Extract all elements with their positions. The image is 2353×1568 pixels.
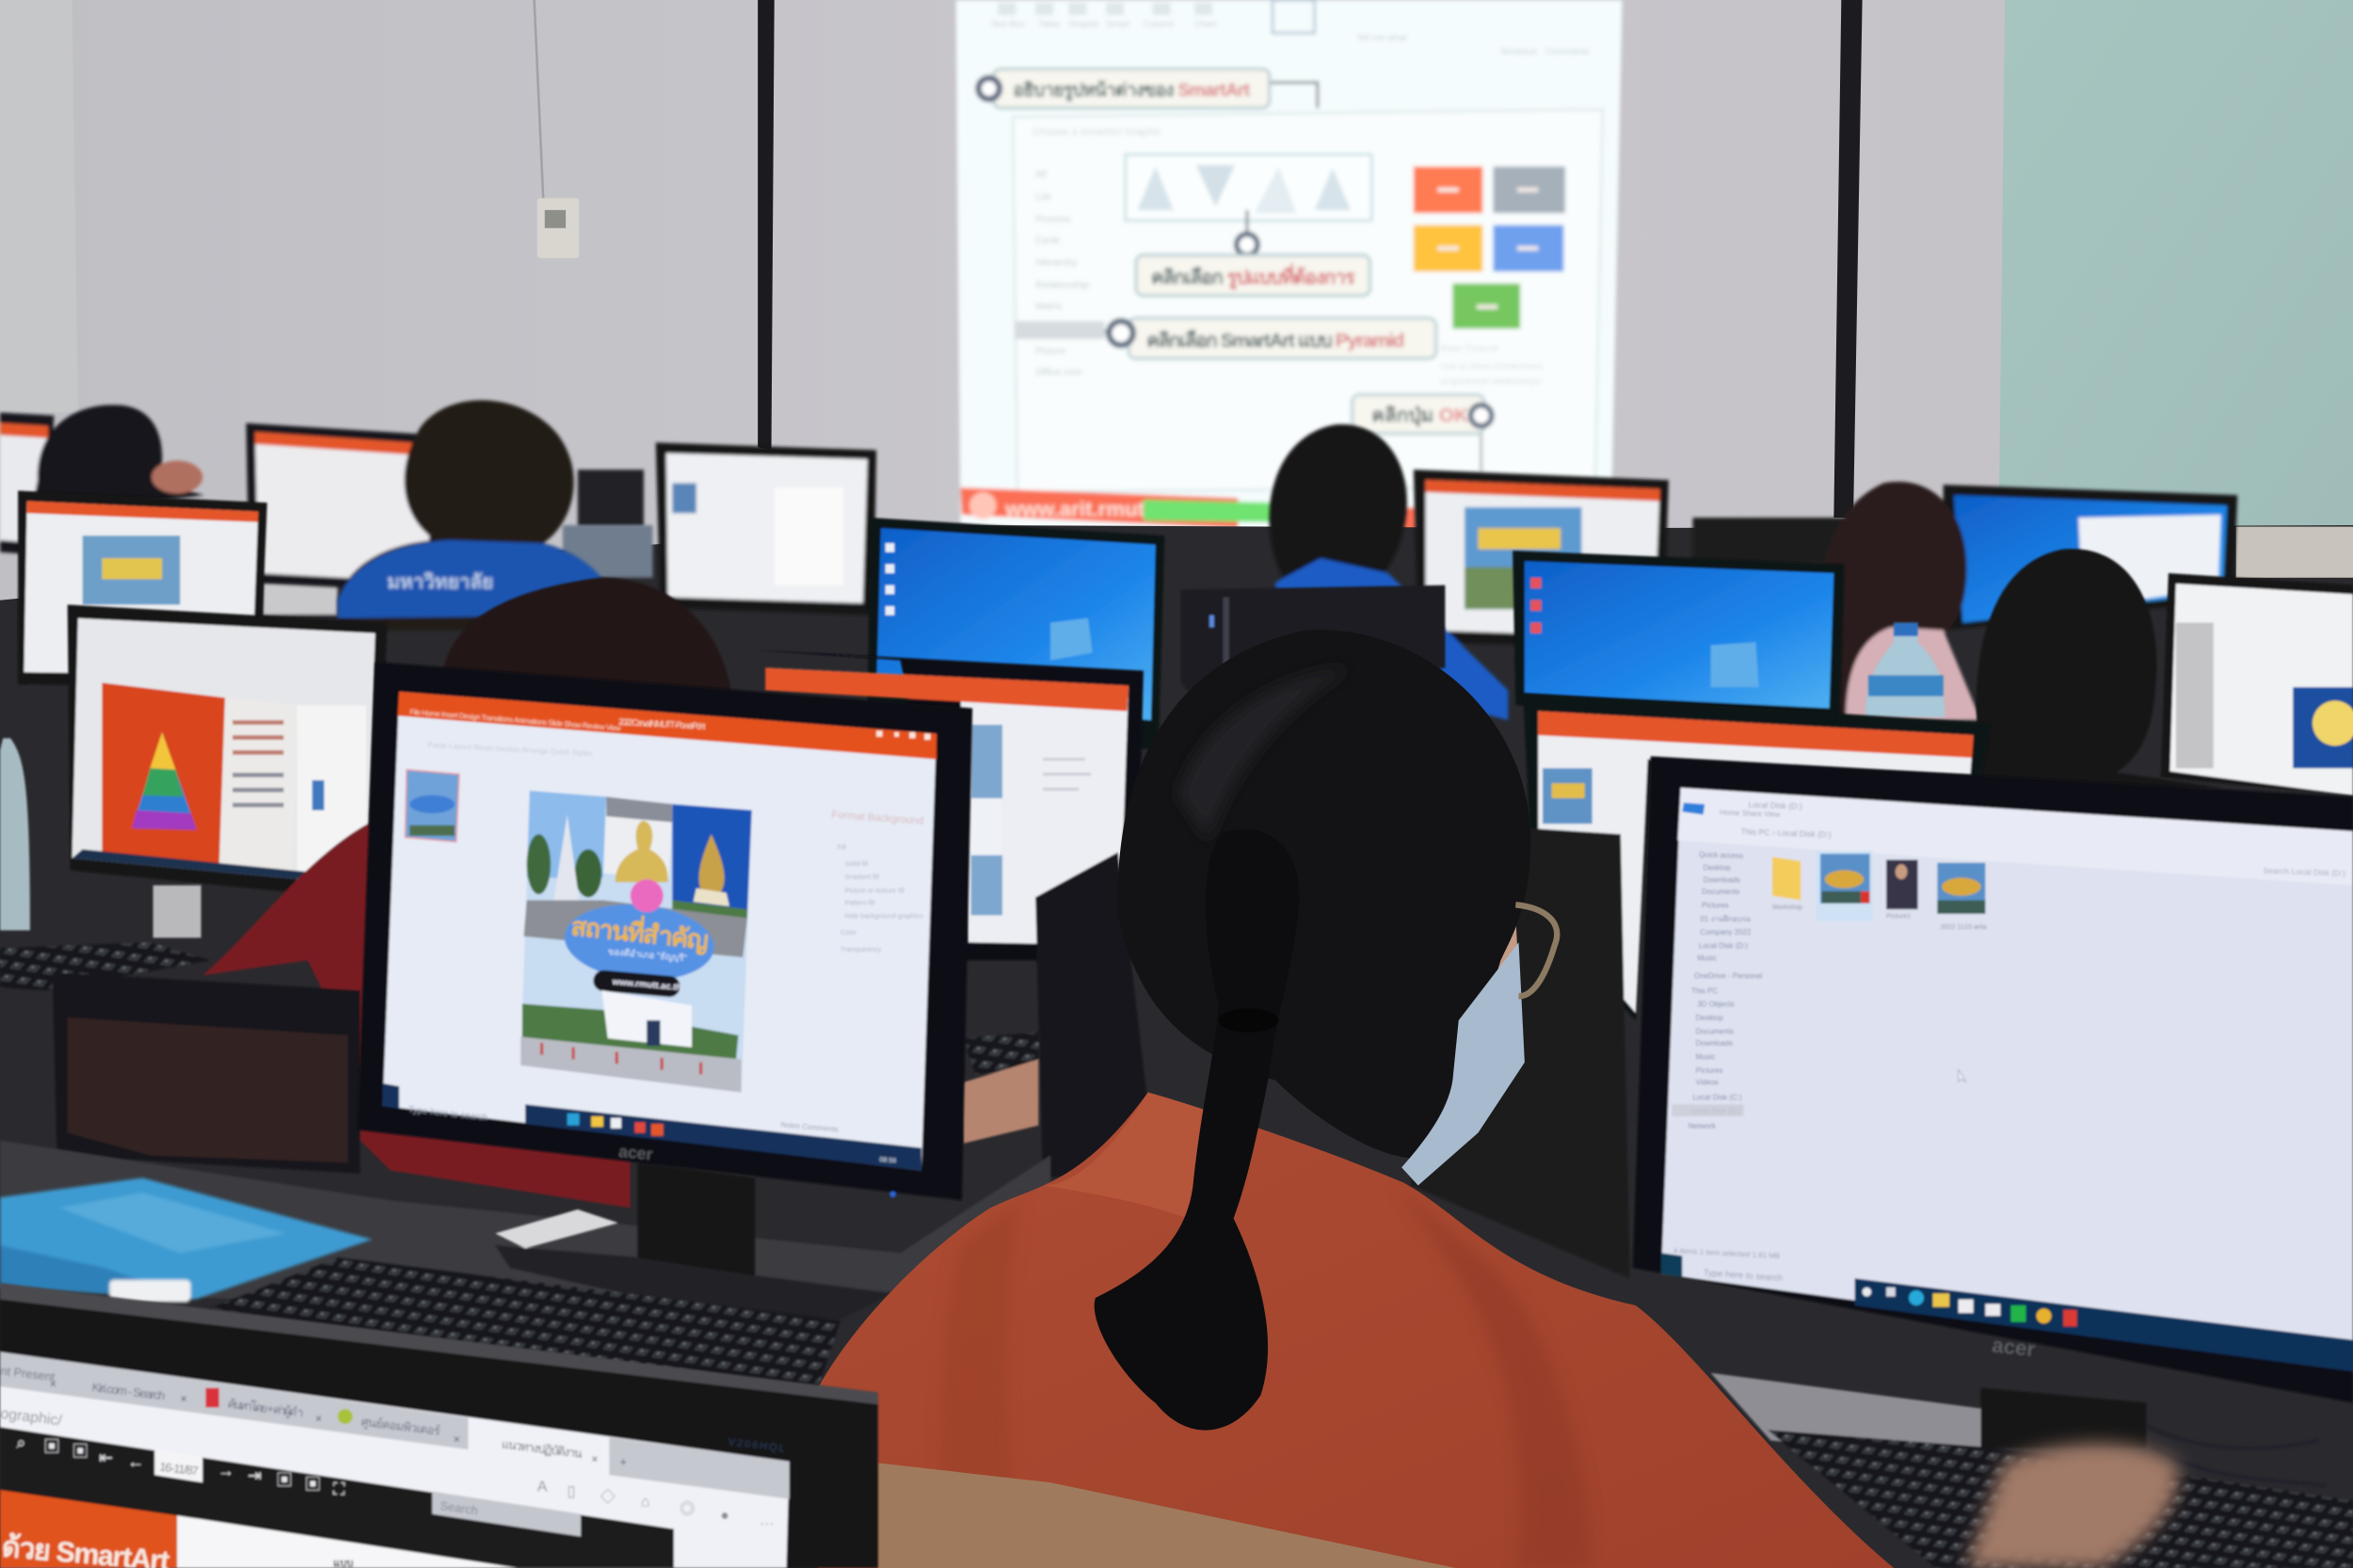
- back monitor 4: [1414, 470, 1669, 648]
- chair back bottom: [878, 1463, 1456, 1568]
- navigation pane: This PC: [1691, 986, 1718, 995]
- person in blue shirt: [338, 400, 608, 631]
- favicons: [205, 1388, 353, 1424]
- dialog category list: Process: [1035, 215, 1071, 225]
- navigation pane: Desktop: [1704, 864, 1731, 872]
- red road posts: [540, 1043, 702, 1074]
- browser window icons: ◎: [680, 1501, 695, 1518]
- portrait icon: [1886, 860, 1918, 920]
- format background pane: Transparency: [840, 946, 882, 953]
- search box caption: Type here to search: [408, 1104, 488, 1123]
- hair sheen: [1178, 667, 1351, 840]
- navigation pane: Pictures: [1696, 1066, 1722, 1075]
- blue desktop monitor: [868, 518, 1164, 750]
- toolbar icons: ▣: [43, 1437, 60, 1456]
- ribbon text: Tell me what: [1356, 33, 1407, 43]
- ribbon tabs: File Home Insert Design Transitions Animations Slide Show Review View: [409, 708, 621, 733]
- ribbon text: Smartcut: [1500, 46, 1537, 56]
- black screen frame right: [1833, 0, 1863, 518]
- tower behind the student: [1035, 828, 1630, 1278]
- tab close marks: ×: [50, 1377, 56, 1391]
- folder icon: [1772, 856, 1802, 911]
- format background pane: Format Background: [831, 809, 924, 827]
- navigation pane: Local Disk (C:): [1692, 1094, 1742, 1102]
- browser window icons: [537, 1480, 775, 1528]
- status bar: Notes Comments: [780, 1120, 839, 1134]
- black screen frame left: [758, 0, 775, 450]
- stand: [495, 1163, 893, 1320]
- back desks and floor darkness: [0, 525, 2353, 1568]
- tab close marks: ×: [591, 1451, 599, 1465]
- pink balloon: [631, 879, 664, 912]
- address text: ographic/: [0, 1406, 63, 1430]
- ribbon text: Text Box: [990, 20, 1025, 30]
- description text: [1441, 344, 1544, 387]
- model label: V206HQL: [728, 1436, 786, 1455]
- navigation pane: OneDrive - Personal: [1694, 971, 1762, 980]
- cables: [2146, 1426, 2326, 1485]
- callout 1: SmartArt window: [979, 69, 1318, 108]
- status text: 4 items 1 item selected 1.81 MB: [1673, 1246, 1780, 1260]
- monitor stand left: [153, 886, 201, 937]
- bezel: [357, 662, 972, 1200]
- golden emblem right: [699, 834, 725, 893]
- dialog category list: [1035, 169, 1089, 378]
- shirt shadow left: [941, 1200, 1020, 1568]
- format background pane: Fill: [838, 843, 846, 851]
- screen: [383, 692, 936, 1171]
- browser window icons: …: [760, 1512, 775, 1528]
- callout 3: pyramid: [1104, 318, 1436, 359]
- selected drive row: [1672, 1104, 1744, 1116]
- dialog category list: List: [1035, 192, 1050, 202]
- navigation pane: Network: [1689, 1122, 1716, 1130]
- monitor back behind the second student: [578, 470, 644, 527]
- navigation pane: Desktop: [1696, 1014, 1723, 1022]
- ribbon text: Paste Layout Reset Section Arrange Quick Styles: [427, 741, 593, 758]
- callout 3: pyramid: คลิกเลือก SmartArt แบบ Pyramid: [1146, 329, 1404, 351]
- callout 2: pick a group: คลิกเลือก รูปแบบที่ต้องการ: [1151, 263, 1356, 290]
- dialog category list: Picture: [1035, 346, 1066, 357]
- hand on keyboard: [1966, 1444, 2178, 1568]
- page number box: [154, 1449, 202, 1482]
- navigation pane: Documents: [1696, 1027, 1734, 1035]
- navigation pane: Music: [1697, 953, 1717, 962]
- shirt: [818, 1093, 1894, 1568]
- browser tabs text: [0, 1363, 584, 1461]
- ribbon text: [990, 20, 1590, 56]
- callout 4: click OK: [1353, 394, 1492, 472]
- back monitor 2: [246, 424, 439, 593]
- left desk keyboard: [0, 942, 210, 990]
- navigation pane: Music: [1696, 1053, 1715, 1062]
- format background pane: [831, 809, 924, 953]
- search field text: Search Local Disk (D:): [2263, 866, 2345, 878]
- page number box: 16-11/87: [159, 1459, 200, 1478]
- thumbnail: [405, 770, 459, 841]
- URL pill: [592, 969, 682, 998]
- building and park: [522, 1004, 738, 1068]
- third row: [0, 578, 1992, 1320]
- selected file icon: [1816, 851, 1873, 921]
- toolbar icons: ▣: [305, 1475, 321, 1494]
- person in blue shirt: มหาวิทยาลัย: [387, 571, 493, 593]
- face mask: [1401, 942, 1525, 1185]
- format background pane: Hide background graphics: [845, 913, 923, 920]
- browser tabs text: Kiri.com - Search: [91, 1380, 166, 1402]
- power led: [889, 1192, 896, 1197]
- dialog category list: Relationship: [1035, 280, 1089, 291]
- monitor far right: [2161, 573, 2353, 795]
- format background pane: Solid fill: [845, 860, 869, 868]
- trees: [527, 834, 551, 894]
- navigation pane: Downloads: [1704, 875, 1740, 884]
- toolbar icons: ⇥: [248, 1466, 262, 1485]
- navigation pane: Local Disk (D:): [1691, 1107, 1740, 1115]
- acer logo right: acer: [1991, 1334, 2037, 1361]
- toolbar icons: ▣: [276, 1470, 293, 1489]
- projection screen: [956, 0, 1623, 583]
- navigation pane: Quick access: [1699, 850, 1743, 860]
- navigation pane: Downloads: [1696, 1039, 1733, 1048]
- toolbar icons: →: [217, 1462, 234, 1480]
- navigation pane: Pictures: [1702, 902, 1729, 910]
- highlighted ribbon button: [1273, 0, 1315, 33]
- poster subtitle: ของดีอำเภอ "ธัญบุรี": [607, 946, 687, 964]
- dialog category list: Hierarchy: [1035, 258, 1078, 268]
- tab close marks: [50, 1377, 627, 1469]
- browser tabs text: ศูนย์คอมพิวเตอร์: [360, 1415, 441, 1439]
- person behind monitors, dark hair: [442, 578, 730, 705]
- tab close marks: +: [619, 1455, 627, 1469]
- callout 1: SmartArt window: อธิบายรูปหน้าต่างของ SmartArt: [1013, 80, 1251, 102]
- person far right: [1977, 549, 2221, 788]
- toolbar icons: ⛶: [333, 1480, 345, 1498]
- hair: [1118, 630, 1530, 1159]
- collar shadow: [1043, 1093, 1245, 1223]
- screen: [0, 1352, 790, 1568]
- shirt fold: [1396, 1185, 1591, 1568]
- desk near left: [0, 1141, 1050, 1320]
- poster title: สถานที่สำคัญ: [569, 907, 711, 956]
- browser tab strip: [0, 1352, 468, 1449]
- monitor left second row: [18, 490, 267, 687]
- forearm at desk: [960, 1060, 1038, 1144]
- left water bottle: [0, 738, 30, 930]
- window controls: [876, 730, 931, 740]
- ribbon text: Shapes: [1068, 20, 1099, 30]
- format background pane: Gradient fill: [845, 873, 879, 881]
- viewer toolbar: [0, 1427, 674, 1568]
- tab close marks: ×: [454, 1432, 460, 1447]
- presenter assistant in blue: [1270, 424, 1508, 720]
- toolbar icons: ⌕: [17, 1432, 25, 1451]
- red footer banner: www.arit.rmutt.ac.th: [1004, 497, 1207, 520]
- back right case: [1692, 518, 1843, 563]
- woman in pink shirt: [1819, 482, 1981, 720]
- back row: [0, 400, 2237, 720]
- glasses: [1515, 904, 1557, 997]
- viewer search box: [432, 1492, 581, 1537]
- wall thermostat: [535, 0, 579, 258]
- title text: 2022 Canva IN MUTT - PowerPoint: [618, 717, 706, 732]
- mouse pointer: [1959, 1070, 1966, 1081]
- desk surface right: [1711, 1373, 1996, 1463]
- URL pill: www.rmutt.ac.th: [611, 977, 682, 993]
- taskbar: [1855, 1278, 2353, 1371]
- person far left: [30, 405, 204, 518]
- bezel: [1633, 757, 2353, 1403]
- monitor right third row: [1523, 694, 1992, 1020]
- white slide: [177, 1515, 518, 1568]
- navigation pane: [1689, 850, 1762, 1130]
- back monitor far left: [0, 412, 54, 555]
- menu tabs: Home Share View: [1720, 808, 1781, 819]
- toolbar icons: ▣: [72, 1442, 88, 1461]
- keyboard centre: [210, 1257, 840, 1388]
- browser tabs text: แนวทางปฏิบัติงาน: [501, 1437, 584, 1461]
- folder icon: Workshop: [1772, 904, 1802, 911]
- computer tower centre: [1181, 585, 1445, 705]
- golden statue: [616, 821, 668, 882]
- file tab: [1682, 803, 1705, 815]
- description text: Basic Pyramid: [1441, 344, 1498, 354]
- ribbon icons: [998, 3, 1212, 15]
- third file icon: 2022 1123 arita: [1941, 923, 1987, 931]
- front student: [818, 630, 1894, 1568]
- browser tabs text: nt Present: [0, 1363, 56, 1384]
- navigation pane: 01 งานฝึกอบรม: [1700, 915, 1751, 923]
- ponytail: [1095, 829, 1299, 1431]
- centre keyboard at back: [964, 1032, 1038, 1074]
- browser window icons: ●: [720, 1508, 729, 1524]
- blue document folder: [0, 1177, 372, 1303]
- clock: 08:56: [879, 1156, 897, 1165]
- portrait icon: Picture1: [1886, 913, 1911, 920]
- red footer banner: [960, 488, 1418, 540]
- callout 2: pick a group: [1136, 255, 1370, 296]
- toolbar icons: ←: [128, 1452, 144, 1471]
- navigation pane: 3D Objects: [1697, 1000, 1735, 1009]
- keyboard right: [1768, 1430, 2353, 1568]
- chair back: [53, 972, 360, 1174]
- toolbar icons: ⇤: [99, 1448, 113, 1466]
- desk items: [563, 525, 653, 578]
- dialog category list: Office.com: [1035, 368, 1081, 378]
- monitor stand right: [1981, 1388, 2146, 1448]
- dialog category list: All: [1035, 169, 1047, 180]
- board tray: [2236, 527, 2353, 578]
- dialog title: Choose a SmartArt Graphic: [1032, 126, 1161, 137]
- dialog category list: Cycle: [1035, 235, 1060, 246]
- navigation pane: Videos: [1696, 1079, 1719, 1087]
- grey road band: [523, 901, 747, 957]
- orange slide panel: [0, 1490, 177, 1568]
- title bar: [398, 692, 936, 760]
- second row: [18, 490, 2353, 795]
- top edge: [0, 1283, 878, 1404]
- format background pane: Color: [840, 929, 857, 936]
- taskbar search text: Type here to search: [1703, 1268, 1783, 1284]
- ribbon text: Smart: [1106, 20, 1130, 30]
- description text: Use to show containment,: [1441, 361, 1544, 372]
- taskbar: [383, 1083, 921, 1171]
- water bottle: [1865, 623, 1945, 717]
- back monitor 3: [656, 442, 876, 616]
- red-shirt seated student: [202, 823, 631, 1208]
- navigation pane: Company 2022: [1700, 928, 1752, 936]
- tab close marks: ×: [315, 1411, 322, 1425]
- teal whiteboard: [1999, 0, 2353, 528]
- tab close marks: ×: [180, 1392, 187, 1406]
- browser window icons: A: [537, 1480, 548, 1496]
- monitor left third row: [68, 604, 387, 901]
- slide poster: [520, 791, 752, 1093]
- hair tie: [1219, 1008, 1278, 1032]
- browser window icons: ⌂: [641, 1495, 649, 1511]
- SmartArt dialog outline: [1013, 109, 1603, 492]
- right monitor assembly: [1711, 1373, 2353, 1568]
- left wall corner: [0, 0, 78, 412]
- blue desktop monitor right: [1513, 551, 1845, 720]
- browser window icons: ◇: [600, 1489, 616, 1506]
- dialog category list: Matrix: [1035, 301, 1063, 312]
- blue badge: [561, 899, 717, 986]
- pale desk patch: [263, 583, 338, 616]
- explorer white header: [1678, 788, 2353, 886]
- navigation pane: Documents: [1702, 888, 1739, 896]
- navigation pane: Local Disk (D:): [1699, 942, 1748, 951]
- selected pyramid category: [1015, 321, 1104, 339]
- third file icon: [1937, 863, 1987, 931]
- address bar text: This PC › Local Disk (D:): [1740, 826, 1832, 840]
- explorer title: Local Disk (D:): [1748, 800, 1802, 811]
- browser window icons: ▯: [568, 1483, 575, 1499]
- screen: [1661, 788, 2353, 1368]
- colour swatches: [1414, 167, 1565, 328]
- ribbon text: Table: [1038, 20, 1060, 30]
- bezel: [0, 1283, 878, 1568]
- ribbon text: Comments: [1545, 46, 1590, 56]
- format background pane: Picture or texture fill: [845, 888, 904, 895]
- format background pane: Pattern fill: [845, 899, 875, 906]
- front centre monitor: [357, 662, 972, 1320]
- start button: [1661, 1253, 1682, 1277]
- front-left monitor: [0, 1283, 878, 1568]
- acer logo: acer: [618, 1142, 653, 1163]
- pyramid gallery: [1126, 154, 1371, 220]
- white spire: [553, 815, 579, 901]
- front right monitor: [1633, 757, 2353, 1403]
- skin by ear: [1418, 915, 1522, 1126]
- centre desk monitor: [750, 649, 1144, 960]
- step number connector: [1237, 210, 1257, 255]
- description text: proportional relationships: [1441, 376, 1542, 387]
- ribbon text: Chart: [1194, 20, 1217, 30]
- viewer search box: Search: [440, 1498, 479, 1517]
- toolbar icons: [17, 1432, 345, 1498]
- callout 4: click OK: คลิกปุ่ม OK: [1371, 405, 1468, 427]
- browser tabs text: ค้นหาโดย + ค่าผู้ดำ: [227, 1397, 304, 1421]
- back monitor right, desktop: [1944, 485, 2237, 631]
- background wall: [0, 0, 2353, 675]
- green lawn right: [672, 901, 747, 919]
- ribbon text: Column: [1144, 20, 1175, 30]
